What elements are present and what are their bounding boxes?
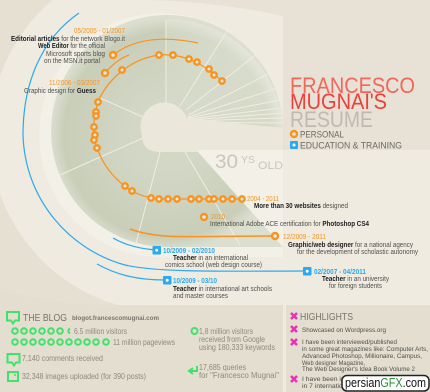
legend [290,130,402,152]
age label [215,152,283,173]
hub [140,102,283,152]
google text [199,327,275,352]
age label: YS [241,155,255,166]
entry: guess: 11/2006 - 03/2007 [49,80,100,87]
google text: using 180,333 keywords [199,343,275,352]
entry: teacher art schools: and master courses [173,293,228,300]
icon: speech bubble [7,312,19,324]
title: FRANCESCO [290,73,415,98]
light outer circle [0,0,430,312]
entry: editorial [11,28,125,65]
invited text: in 7 international [302,383,352,390]
entry: teacher comics: Teacher in an international [173,255,248,262]
age label: 30 [215,152,238,173]
entry: editorial: Editorial articles for the network Blogo.it [11,36,125,43]
visitors text: 6.5 million visitors [74,327,127,336]
blue timeline arcs [23,13,307,280]
entry: teacher art schools: Teacher in international art schools [173,286,272,293]
orange outer arcs [105,39,275,237]
entry: editorial: Microsoft sports blog [46,51,105,58]
entry: certification: International Adobe ACE certification for Photoshop CS4 [210,221,369,228]
entry: certification [210,214,369,228]
entry: editorial: on the MSN.it portal [44,58,100,65]
icon: google dot [192,328,198,334]
orange timeline spiral [94,55,241,199]
comments text: 7,140 comments received [22,354,103,363]
entry: graphic designer: Graphic/web designer for a national agency [288,242,413,249]
entry: websites: 2004 - 2011 [247,196,279,203]
google text: received from Google [199,335,265,344]
entry: teacher university: for foreign students [329,283,382,290]
pageviews dots [12,339,109,345]
icon: cross [291,326,297,332]
images text: 32,348 images uploaded (for 390 posts) [22,372,146,381]
entry: editorial: Web Editor for the official [38,43,105,50]
entry: teacher university: Teacher in an university [322,276,389,283]
entry: guess [24,80,100,95]
wordpress text: Showcased on Wordpress.org [302,327,386,334]
icon: comments [8,354,20,366]
title: MUGNAI'S [290,89,387,114]
icon: cross [291,376,297,382]
disc with radial segments [51,15,283,247]
invited text: I have been invited [302,376,359,383]
entry: teacher art schools: 10/2009 - 03/10 [173,278,217,285]
entry: certification: 2010 [211,214,225,221]
visitors dots [12,328,70,334]
entry: guess: Graphic design for Guess [24,88,96,95]
magazines text: The Web Designer's Idea Book Volume 2 [302,366,415,373]
highlights heading: HIGHLIGHTS [300,312,353,323]
queries text: for "Francesco Mugnai" [199,371,279,380]
magazines text [302,339,428,373]
entry: websites [247,196,348,210]
entry: teacher comics [163,248,262,269]
queries text: 17,685 queries [199,363,246,372]
entry: teacher art schools [173,278,272,300]
entry: websites: More than 30 websites designed [254,203,348,210]
panel: highlights [291,312,428,390]
blog url: blogot.francescomugnai.com [72,315,159,322]
icon: image [8,372,18,381]
icon: cross [291,313,297,319]
age label: OLD [258,160,283,172]
magazines text: I have been interviewed/published [302,339,397,346]
entry: graphic designer [283,234,418,256]
magazines text: Web designer Magazine, [302,360,365,367]
entry: teacher university: 02/2007 - 04/2011 [314,269,366,276]
title: RESUME [290,107,373,132]
google text: 1,8 million visitors [199,327,253,336]
legend: EDUCATION & TRAINING [300,140,402,152]
legend: PERSONAL [300,130,344,140]
orange milestone nodes [102,52,278,239]
panel backgrounds [0,290,430,392]
watermark: persianGFX.com [345,376,426,390]
disc ring [39,13,283,257]
entry: graphic designer: for the development of scholastic autonomy [297,249,418,256]
icon: cross [291,339,297,345]
entry: teacher comics: 10/2009 - 02/2010 [163,248,215,255]
panel: the blog [7,312,279,381]
entry: graphic designer: 12/2009 - 2011 [283,234,326,241]
pageviews text: 11 million pageviews [113,338,175,347]
icon: arrow [189,366,197,374]
title [290,73,415,132]
blog heading: THE BLOG [23,313,67,324]
magazines text: Advanced Photoshop, Millionaire, Campus, [302,353,422,360]
orange timeline dots [91,52,245,202]
queries text [199,363,279,380]
entry: teacher comics: comics school (web design course) [165,262,262,269]
invited text [302,376,359,390]
blue timeline nodes [152,246,312,284]
entry: teacher university [314,269,389,290]
entry: editorial: 05/2005 - 01/2007 [74,28,125,35]
